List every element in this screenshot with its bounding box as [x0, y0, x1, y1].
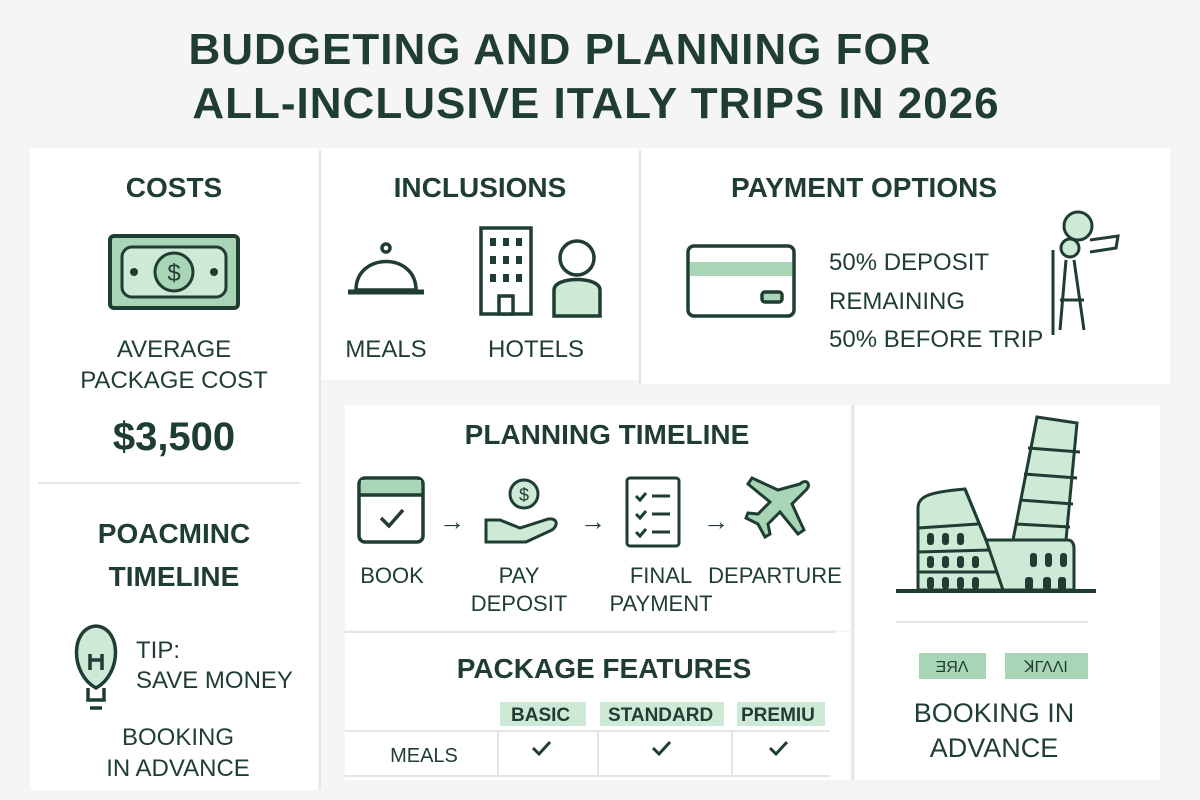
labels: timeline steps: [360, 563, 842, 616]
icon: meal cloche: [348, 244, 424, 292]
panel: planning timeline: [345, 405, 850, 630]
icon: airplane: [746, 478, 808, 537]
table header: BASIC: [511, 705, 570, 726]
icon: banknote: [110, 236, 238, 308]
panel: costs: [30, 148, 318, 790]
labels: meals hotels: [345, 336, 584, 363]
icon: hotel: [481, 228, 531, 314]
text: tip: [136, 637, 293, 694]
heading: inclusions: INCLUSIONS: [394, 172, 566, 203]
title: [188, 25, 1000, 128]
number: 3500: $3,500: [113, 415, 235, 459]
labels: timeline steps: DEPOSIT: [471, 591, 567, 616]
panel: payment options: [640, 148, 1170, 384]
heading: timeline: [98, 518, 250, 592]
title: BUDGETING AND PLANNING FOR: [188, 25, 932, 74]
text: payment terms: [829, 249, 1043, 353]
text: payment terms: REMAINING: [829, 288, 965, 315]
text: booking in advance: BOOKING IN: [914, 698, 1074, 728]
table header: [500, 702, 825, 726]
icon: person: [554, 241, 600, 316]
labels: meals hotels: MEALS: [345, 336, 427, 363]
labels: meals hotels: HOTELS: [488, 336, 584, 363]
heading: package features: PACKAGE FEATURES: [457, 653, 751, 684]
table header: STANDARD: [608, 705, 713, 726]
table row: meals: [345, 731, 830, 776]
labels: timeline steps: PAY: [499, 563, 540, 588]
arrow: →: [439, 506, 465, 536]
text: booking in advance: [914, 698, 1074, 763]
badges: [919, 653, 1088, 679]
panel: package features: [345, 632, 850, 780]
arrow: →: [580, 506, 606, 536]
icon: hand with coin: $: [519, 485, 529, 505]
icon: credit card: [688, 246, 794, 316]
icon: banknote: $: [167, 260, 181, 287]
heading: costs: COSTS: [126, 172, 222, 203]
icon: colosseum and pisa tower: [896, 417, 1096, 591]
labels: timeline steps: FINAL: [630, 563, 692, 588]
text: booking in advance: [106, 724, 250, 782]
text: payment terms: 50% DEPOSIT: [829, 249, 989, 276]
title: ALL-INCLUSIVE ITALY TRIPS IN 2026: [192, 79, 1000, 128]
text: tip: SAVE MONEY: [136, 667, 293, 694]
icon: calendar: [359, 478, 423, 542]
heading: payment options: PAYMENT OPTIONS: [731, 172, 997, 203]
text: booking in advance: IN ADVANCE: [106, 755, 250, 782]
icon: checklist: [627, 478, 679, 546]
labels: timeline steps: PAYMENT: [609, 591, 713, 616]
icon: hand with coin: [486, 480, 556, 542]
table header: PREMIU: [741, 705, 815, 726]
table row: meals: MEALS: [390, 745, 458, 767]
text: booking in advance: ADVANCE: [930, 733, 1058, 763]
arrow: →: [703, 506, 729, 536]
text: booking in advance: BOOKING: [122, 724, 234, 751]
text: average package cost: [80, 336, 268, 394]
text: average package cost: PACKAGE COST: [80, 367, 268, 394]
icon: traveler: [1053, 212, 1118, 335]
heading: timeline: POACMINC: [98, 518, 250, 549]
heading: timeline: TIMELINE: [109, 561, 239, 592]
text: payment terms: 50% BEFORE TRIP: [829, 326, 1043, 353]
badges: ƎЯΛ: [936, 659, 969, 676]
text: tip: TIP:: [136, 637, 180, 664]
panel: landmarks: [853, 405, 1160, 780]
heading: planning timeline: PLANNING TIMELINE: [465, 419, 749, 450]
badges: ꓘΓΛΛI: [1023, 659, 1068, 676]
panel: inclusions: [320, 148, 638, 790]
icon: lightbulb: [76, 626, 116, 708]
labels: timeline steps: BOOK: [360, 563, 424, 588]
text: average package cost: AVERAGE: [117, 336, 231, 363]
labels: timeline steps: DEPARTURE: [708, 563, 842, 588]
